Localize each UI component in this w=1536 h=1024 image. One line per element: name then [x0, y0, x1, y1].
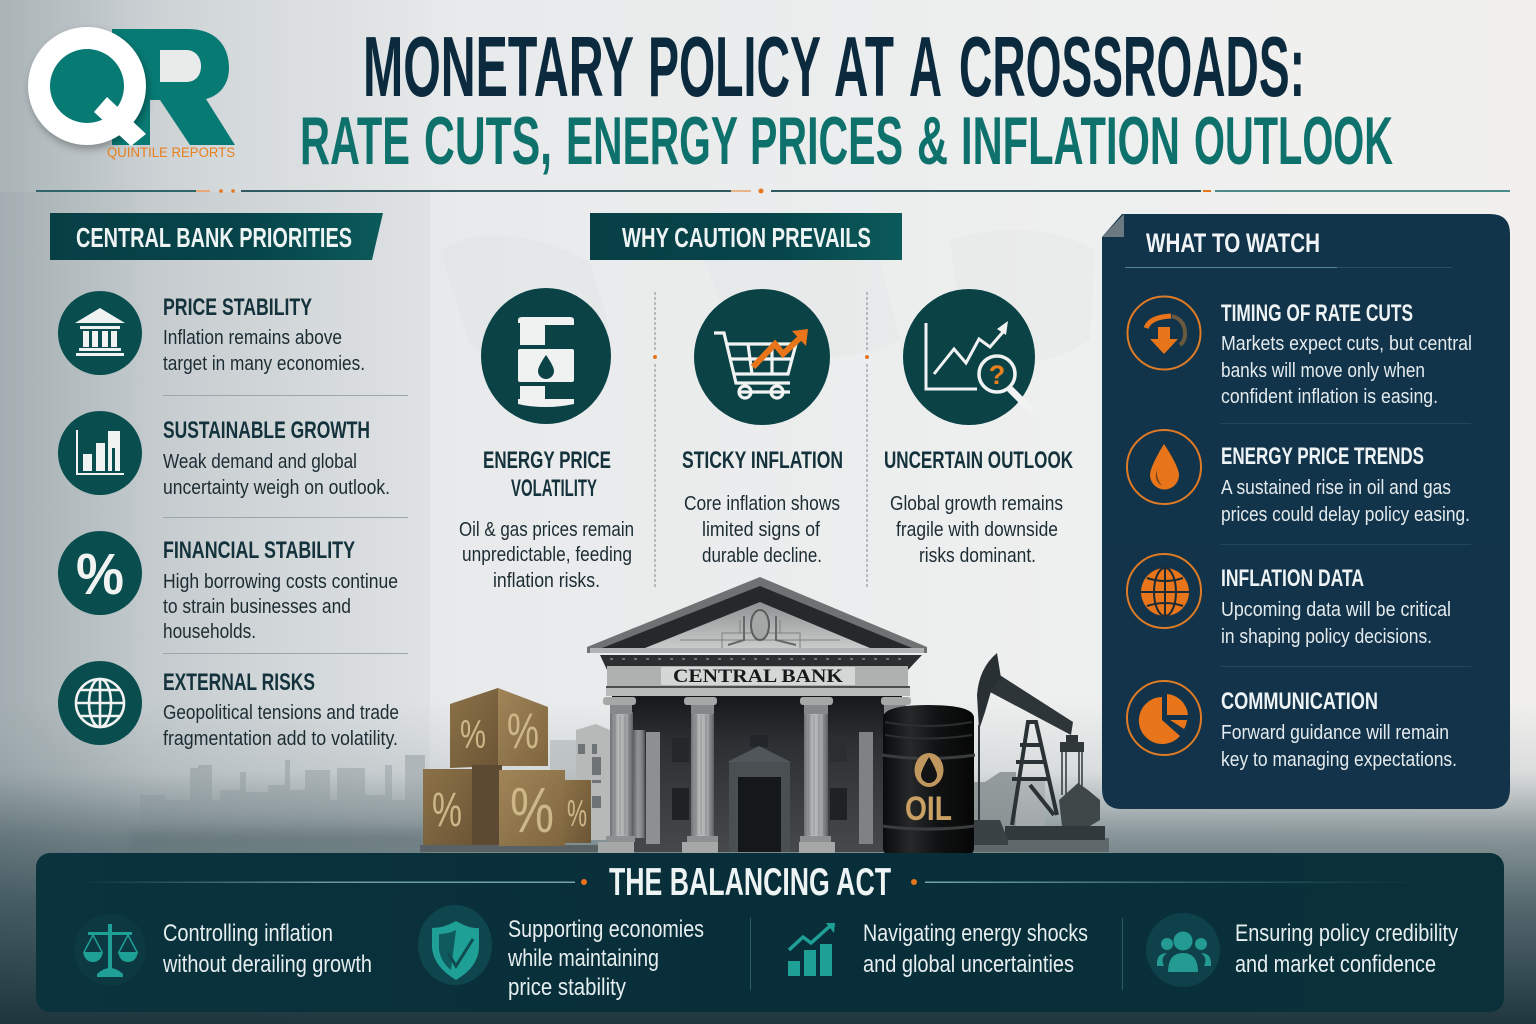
bank: CENTRAL BANK — [673, 666, 843, 687]
percent cubes — [423, 688, 591, 846]
item: communication: COMMUNICATION — [1221, 688, 1378, 715]
item: uncertain outlook: ? — [989, 360, 1005, 390]
percent cubes: % — [507, 703, 539, 759]
item: energy price trends — [1127, 430, 1470, 526]
item: sticky inflation: durable decline. — [702, 545, 822, 567]
title: POLICY — [648, 20, 821, 115]
item: price stability — [58, 291, 365, 375]
item: external risks: fragmentation add to volatility. — [163, 728, 398, 750]
header divider — [36, 188, 1510, 194]
title: CUTS, — [424, 103, 552, 179]
columns — [610, 712, 828, 840]
title: INFLATION — [961, 103, 1180, 179]
background buildings — [550, 724, 1045, 840]
illustration: central bank building with cubes, oil barrel and pumpjack — [420, 577, 1109, 862]
heading: central bank priorities: CENTRAL BANK PRIORITIES — [76, 222, 352, 253]
panel: central bank priorities — [50, 213, 408, 750]
title: A — [909, 20, 942, 115]
item: financial stability: to strain businesses and — [163, 596, 351, 618]
title: & — [917, 103, 948, 179]
heading: the balancing act: THE BALANCING ACT — [609, 861, 891, 904]
item: timing of rate cuts: confident inflation is easing. — [1221, 386, 1438, 408]
item: ensuring policy credibility — [1146, 913, 1458, 987]
pediment — [587, 577, 927, 653]
item: sticky inflation: Core inflation shows — [684, 493, 840, 515]
item: uncertain outlook: UNCERTAIN OUTLOOK — [884, 447, 1073, 474]
item: financial stability: % — [76, 542, 124, 607]
title: MONETARY — [363, 20, 634, 115]
item: supporting economies — [418, 905, 704, 1001]
item: communication — [1127, 681, 1457, 771]
item: energy price volatility: unpredictable, feeding — [462, 544, 632, 566]
item: energy price trends: A sustained rise in oil and gas — [1221, 477, 1451, 499]
item: sustainable growth: SUSTAINABLE GROWTH — [163, 417, 370, 444]
item: external risks: EXTERNAL RISKS — [163, 669, 315, 696]
item: sustainable growth: uncertainty weigh on outlook. — [163, 477, 390, 499]
panel: why caution prevails — [459, 213, 1073, 592]
item: controlling inflation — [74, 914, 372, 986]
item: price stability: PRICE STABILITY — [163, 294, 312, 321]
heading: why caution prevails — [590, 213, 902, 260]
bank — [587, 577, 927, 853]
item: energy price trends: ENERGY PRICE TRENDS — [1221, 443, 1424, 470]
item: supporting economies: price stability — [508, 974, 626, 1001]
item: uncertain outlook: Global growth remains — [890, 493, 1063, 515]
item: controlling inflation: without derailing growth — [162, 951, 372, 978]
item: external risks — [58, 661, 399, 750]
panel: what to watch — [1102, 214, 1510, 809]
item: financial stability: FINANCIAL STABILITY — [163, 537, 355, 564]
item: inflation data — [1127, 554, 1451, 648]
item: timing of rate cuts: TIMING OF RATE CUTS — [1221, 300, 1413, 327]
item: financial stability: High borrowing costs continue — [163, 571, 398, 593]
item: uncertain outlook: risks dominant. — [919, 545, 1036, 567]
item: controlling inflation: Controlling inflation — [163, 920, 333, 947]
heading: what to watch: WHAT TO WATCH — [1146, 228, 1320, 258]
item: energy price volatility: inflation risks. — [493, 570, 600, 592]
item: financial stability — [58, 531, 398, 643]
oil barrel: OIL — [905, 790, 952, 828]
title: RATE — [300, 103, 410, 179]
title: PRICES — [750, 103, 903, 179]
logo: Quintile Reports — [28, 27, 235, 160]
item: price stability: target in many economies. — [163, 353, 365, 375]
item: timing of rate cuts: Markets expect cuts, but central — [1221, 333, 1472, 355]
item: navigating energy shocks: Navigating energy shocks — [863, 920, 1088, 947]
title — [300, 20, 1393, 179]
item: communication: Forward guidance will remain — [1221, 722, 1449, 744]
item: timing of rate cuts — [1128, 296, 1472, 408]
item: ensuring policy credibility: Ensuring policy credibility — [1235, 920, 1458, 947]
item: ensuring policy credibility: and market confidence — [1235, 951, 1436, 978]
pumpjack — [974, 653, 1105, 845]
item: navigating energy shocks: and global uncertainties — [863, 951, 1074, 978]
item: sticky inflation: STICKY INFLATION — [682, 447, 843, 474]
title: AT — [834, 20, 894, 115]
item: energy price volatility: VOLATILITY — [511, 475, 597, 502]
item: inflation data: in shaping policy decisions. — [1221, 626, 1432, 648]
item: financial stability: households. — [163, 621, 256, 643]
logo: Quintile Reports: QUINTILE REPORTS — [107, 145, 235, 160]
faint city skyline — [130, 755, 430, 848]
percent cubes: % — [567, 793, 587, 835]
item: supporting economies: while maintaining — [507, 945, 659, 972]
percent cubes: % — [460, 713, 486, 757]
item: sticky inflation: limited signs of — [702, 519, 820, 541]
item: external risks: Geopolitical tensions and trade — [163, 702, 399, 724]
percent cubes: % — [432, 784, 462, 837]
panel: the balancing act — [36, 853, 1504, 1012]
heading: why caution prevails: WHY CAUTION PREVAILS — [622, 222, 871, 253]
item: uncertain outlook — [884, 289, 1073, 567]
item: sticky inflation — [682, 289, 843, 567]
item: timing of rate cuts: banks will move only when — [1221, 360, 1425, 382]
item: energy price trends: prices could delay policy easing. — [1221, 504, 1470, 526]
heading: central bank priorities — [50, 213, 383, 260]
item: energy price volatility: Oil & gas prices remain — [459, 519, 634, 541]
item: supporting economies: Supporting economies — [508, 916, 704, 943]
oil barrel — [882, 705, 975, 862]
item: sustainable growth: Weak demand and global — [163, 451, 357, 473]
item: navigating energy shocks — [788, 920, 1088, 978]
ground — [420, 845, 1105, 852]
item: energy price volatility — [459, 288, 634, 592]
item: sustainable growth — [58, 411, 390, 499]
item: inflation data: Upcoming data will be critical — [1221, 599, 1451, 621]
item: inflation data: INFLATION DATA — [1221, 565, 1364, 592]
item: price stability: Inflation remains above — [163, 327, 342, 349]
item: energy price volatility: ENERGY PRICE — [483, 447, 611, 474]
percent cubes: % — [510, 774, 554, 846]
item: uncertain outlook: fragile with downside — [896, 519, 1058, 541]
heading: the balancing act — [75, 861, 1430, 904]
title: OUTLOOK — [1194, 103, 1393, 179]
item: communication: key to managing expectations. — [1221, 749, 1457, 771]
title: ENERGY — [566, 103, 738, 179]
